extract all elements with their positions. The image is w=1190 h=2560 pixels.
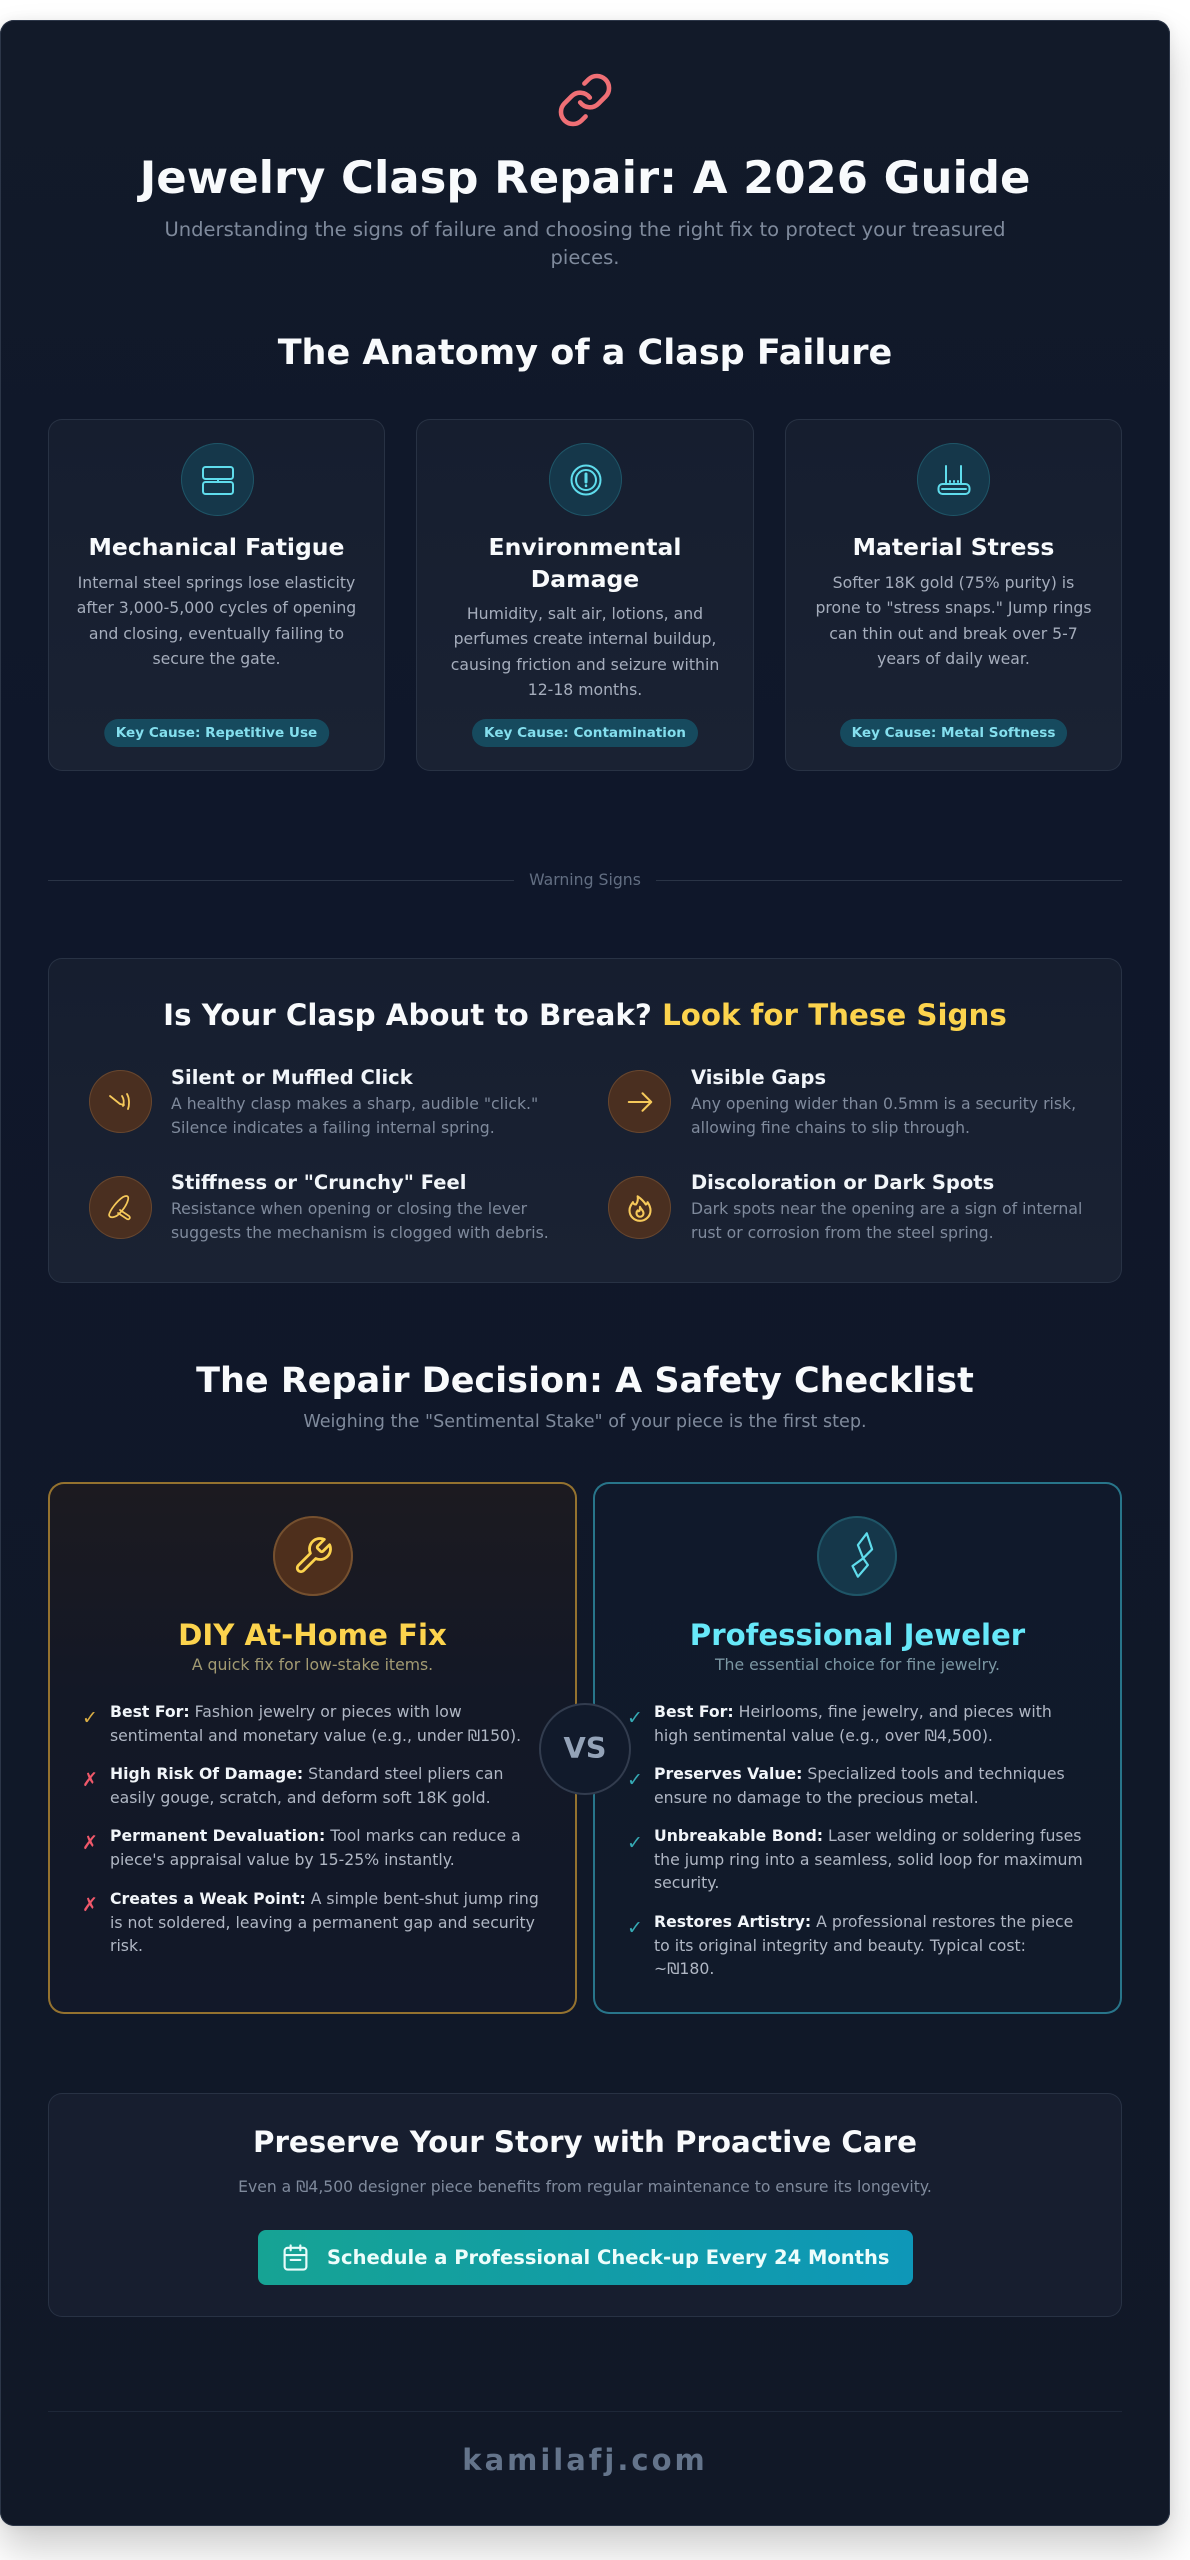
- icon: circle backing: [817, 1516, 897, 1596]
- card text: can thin out and break over 5-7: [829, 624, 1078, 643]
- button label: Schedule a Professional Check-up Every 24 Months: [327, 2246, 889, 2269]
- item text: easily gouge, scratch, and deform soft 18K gold.: [110, 1788, 491, 1806]
- subtitle: [164, 218, 1006, 269]
- item text: sentimental and monetary value (e.g., under ₪150).: [110, 1726, 521, 1744]
- card text: Internal steel springs lose elasticity: [78, 573, 355, 592]
- badge: [840, 719, 1067, 747]
- badge: [104, 719, 329, 747]
- badge: Key Cause: Repetitive Use: [116, 725, 317, 741]
- icon: arrow: [608, 1070, 671, 1133]
- card text: Humidity, salt air, lotions, and: [467, 604, 703, 623]
- card text: causing friction and seizure within: [451, 655, 719, 674]
- item text: risk.: [110, 1936, 143, 1955]
- divider: warning signs: Warning Signs: [529, 870, 641, 889]
- mark: ✗: [82, 1769, 98, 1791]
- sign text: [691, 1199, 1082, 1242]
- footer rule: [48, 2411, 1122, 2412]
- item: preserves value: [627, 1764, 1065, 1806]
- panel title: DIY At-Home Fix: [178, 1618, 447, 1652]
- card text: after 3,000-5,000 cycles of opening: [77, 598, 356, 617]
- item: restores artistry: [627, 1912, 1073, 1978]
- item text: [110, 1764, 503, 1806]
- badge: [472, 719, 698, 747]
- icon: contained warning: [549, 443, 622, 516]
- card title: [489, 533, 681, 593]
- mark: ✗: [82, 1894, 98, 1916]
- panel title: Professional Jeweler: [690, 1618, 1025, 1652]
- panel: proactive care: [48, 2093, 1122, 2317]
- item text: to its original integrity and beauty. Typical cost:: [654, 1936, 1026, 1954]
- subheading: Weighing the "Sentimental Stake" of your piece is the first step.: [303, 1412, 867, 1432]
- item: high risk: [82, 1764, 503, 1806]
- item text: piece's appraisal value by 15-25% instantly.: [110, 1850, 455, 1868]
- item: weak point: [82, 1889, 539, 1955]
- card text: [77, 573, 356, 668]
- mark: ✓: [627, 1832, 643, 1854]
- card text: perfumes create internal buildup,: [454, 629, 716, 648]
- item text: ~₪180.: [654, 1959, 714, 1978]
- card text: [451, 604, 719, 699]
- badge: Key Cause: Metal Softness: [852, 725, 1055, 741]
- item: devaluation: [82, 1826, 521, 1868]
- sign text: rust or corrosion from the steel spring.: [691, 1222, 994, 1242]
- panel: professional: [593, 1482, 1122, 2014]
- mark: ✓: [627, 1917, 643, 1939]
- icon: chain link: [558, 74, 612, 126]
- item text: Unbreakable Bond: Laser welding or soldering fuses: [654, 1826, 1081, 1845]
- sign title: Silent or Muffled Click: [171, 1066, 413, 1089]
- panel subtitle: The essential choice for fine jewelry.: [715, 1655, 1000, 1674]
- subtitle: pieces.: [550, 246, 619, 269]
- subtitle: Understanding the signs of failure and choosing the right fix to protect your treasured: [164, 218, 1006, 241]
- sign text: allowing fine chains to slip through.: [691, 1118, 970, 1136]
- panel: warning signs: [48, 958, 1122, 1283]
- card text: secure the gate.: [152, 649, 281, 668]
- card text: years of daily wear.: [877, 649, 1030, 668]
- sign title: Visible Gaps: [691, 1066, 826, 1089]
- sign text: [171, 1199, 549, 1242]
- sign text: [171, 1094, 538, 1136]
- mark: ✓: [627, 1707, 643, 1729]
- sign text: Any opening wider than 0.5mm is a security risk,: [691, 1094, 1076, 1113]
- card title: Environmental: [489, 533, 681, 561]
- mark: ✗: [82, 1832, 98, 1854]
- icon: calendar: [284, 2244, 308, 2271]
- item text: high sentimental value (e.g., over ₪4,500).: [654, 1726, 993, 1744]
- sign title: Discoloration or Dark Spots: [691, 1171, 994, 1194]
- card text: Softer 18K gold (75% purity) is: [833, 573, 1074, 592]
- VS badge: [539, 1703, 631, 1795]
- item text: [654, 1764, 1065, 1806]
- sign text: suggests the mechanism is clogged with debris.: [171, 1222, 549, 1242]
- sign text: Silence indicates a failing internal spring.: [171, 1118, 495, 1136]
- item text: is not soldered, leaving a permanent gap and security: [110, 1912, 535, 1932]
- panel subtitle: A quick fix for low-stake items.: [192, 1655, 433, 1674]
- sign text: A healthy clasp makes a sharp, audible "click.": [171, 1094, 538, 1113]
- card title: Mechanical Fatigue: [89, 533, 344, 561]
- heading: repair decision: The Repair Decision: A Safety Checklist: [196, 1361, 974, 1401]
- sign: stiffness: [89, 1171, 549, 1242]
- item text: the jump ring into a seamless, solid loop for maximum: [654, 1850, 1083, 1868]
- item text: Best For: Heirlooms, fine jewelry, and pieces with: [654, 1702, 1052, 1721]
- item text: [110, 1702, 521, 1744]
- card text: prone to "stress snaps." Jump rings: [815, 598, 1092, 617]
- item text: [110, 1889, 539, 1955]
- item: best for: [82, 1702, 521, 1744]
- item text: Preserves Value: Specialized tools and techniques: [654, 1764, 1065, 1783]
- icon: tool: [89, 1176, 152, 1239]
- item: unbreakable bond: [627, 1826, 1083, 1892]
- item text: Creates a Weak Point: A simple bent-shut jump ring: [110, 1889, 539, 1908]
- card title: Material Stress: [853, 533, 1054, 561]
- badge: Key Cause: Contamination: [484, 725, 686, 741]
- item text: ensure no damage to the precious metal.: [654, 1788, 979, 1806]
- icon: router stress: [917, 443, 990, 516]
- panel: material stress: [785, 419, 1122, 771]
- sign: discoloration: [608, 1171, 1082, 1242]
- button: [258, 2230, 913, 2285]
- icon: sound: [89, 1070, 152, 1133]
- sign text: Resistance when opening or closing the lever: [171, 1199, 527, 1218]
- heading: anatomy: The Anatomy of a Clasp Failure: [278, 333, 892, 373]
- icon: linked diamonds: [851, 1532, 874, 1578]
- panel: mechanical fatigue: [48, 419, 385, 771]
- panel: DIY: [48, 1482, 577, 2014]
- item text: security.: [654, 1873, 719, 1892]
- heading: Preserve Your Story with Proactive Care: [253, 2125, 917, 2159]
- sign: visible gaps: [608, 1066, 1076, 1136]
- card title: Damage: [531, 565, 639, 593]
- sign title: Stiffness or "Crunchy" Feel: [171, 1171, 466, 1194]
- icon: wrench: [273, 1516, 353, 1596]
- sign text: Dark spots near the opening are a sign of internal: [691, 1199, 1082, 1218]
- card text: 12-18 months.: [528, 680, 642, 699]
- card text: and closing, eventually failing to: [89, 624, 344, 643]
- icon: flame: [608, 1176, 671, 1239]
- sign text: [691, 1094, 1076, 1136]
- item text: Permanent Devaluation: Tool marks can reduce a: [110, 1826, 521, 1845]
- text: Even a ₪4,500 designer piece benefits from regular maintenance to ensure its longevity.: [238, 2178, 932, 2196]
- mark: ✓: [82, 1707, 98, 1729]
- item text: High Risk Of Damage: Standard steel pliers can: [110, 1764, 503, 1783]
- mark: ✓: [627, 1769, 643, 1791]
- VS badge: VS: [563, 1731, 607, 1765]
- item text: [110, 1826, 521, 1868]
- item text: Best For: Fashion jewelry or pieces with low: [110, 1702, 462, 1721]
- item text: Restores Artistry: A professional restores the piece: [654, 1912, 1073, 1931]
- heading: Is Your Clasp About to Break? Look for These Signs: [163, 998, 1007, 1032]
- title: Jewelry Clasp Repair: A 2026 Guide: [140, 151, 1030, 204]
- panel: environmental damage: [416, 419, 754, 771]
- item text: [654, 1702, 1052, 1744]
- icon: server: [181, 443, 254, 516]
- item text: [654, 1826, 1083, 1892]
- footer: site name: kamilafj.com: [462, 2443, 708, 2477]
- item: best for: [627, 1702, 1052, 1744]
- sign: silent click: [89, 1066, 538, 1136]
- card text: [815, 573, 1092, 668]
- item text: [654, 1912, 1073, 1978]
